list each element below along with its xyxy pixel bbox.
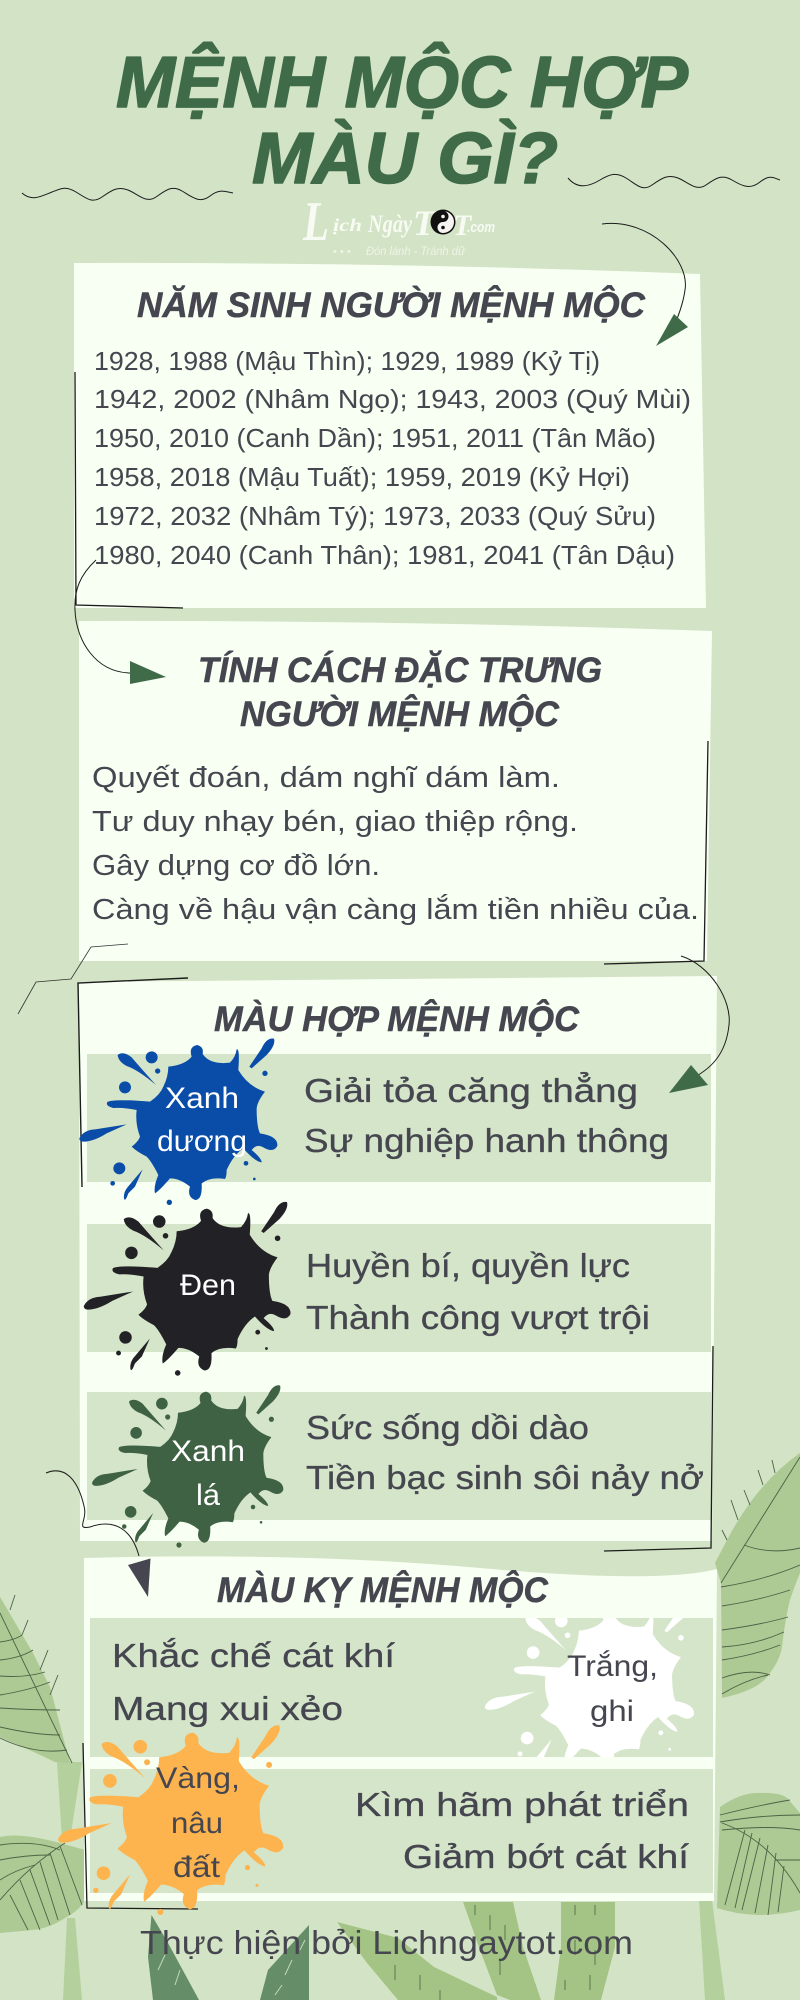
row: yellow background bbox=[90, 1769, 713, 1893]
logo: Đón lành - Tránh dữ bbox=[366, 246, 466, 258]
text: white meaning: Khắc chế cát khí bbox=[112, 1637, 395, 1674]
label: blue bbox=[157, 1082, 247, 1158]
label: blue: Xanh bbox=[165, 1082, 239, 1115]
splat: blue bbox=[79, 1039, 277, 1205]
label: white: Trắng, bbox=[567, 1650, 658, 1683]
row: blue background bbox=[87, 1054, 711, 1182]
splat: green bbox=[92, 1385, 283, 1548]
splat: black bbox=[84, 1202, 291, 1376]
logo: T bbox=[453, 209, 473, 242]
panel: matching colours bbox=[79, 976, 717, 1541]
text: black meaning: Thành công vượt trội bbox=[306, 1299, 650, 1336]
birth year list: 1950, 2010 (Canh Dần); 1951, 2011 (Tân Mão) bbox=[94, 423, 656, 453]
decorative leaves bbox=[0, 1453, 800, 2000]
logo: ịch bbox=[332, 215, 362, 235]
row: white background bbox=[90, 1618, 713, 1757]
panel: birth years bbox=[74, 263, 706, 608]
label: white bbox=[567, 1650, 658, 1728]
label: green: lá bbox=[196, 1479, 220, 1512]
panel: personality bbox=[79, 621, 712, 961]
splat: white bbox=[485, 1618, 694, 1757]
logo: .com bbox=[467, 219, 495, 236]
title: MÀU GÌ? bbox=[252, 119, 558, 199]
squiggle: left bbox=[22, 188, 233, 200]
text: blue meaning: Giải tỏa căng thẳng bbox=[304, 1072, 638, 1109]
label: orange: nâu bbox=[171, 1807, 223, 1840]
label: blue: dương bbox=[157, 1125, 247, 1158]
text: orange meaning: Giảm bớt cát khí bbox=[403, 1838, 689, 1875]
heading: birth years: NĂM SINH NGƯỜI MỆNH MỘC bbox=[137, 285, 646, 325]
logo bbox=[302, 191, 495, 258]
arrow: to personality bbox=[75, 560, 166, 684]
heading: clashing colours: MÀU KỴ MỆNH MỘC bbox=[217, 1570, 549, 1610]
text: blue meaning: Sự nghiệp hanh thông bbox=[304, 1122, 669, 1159]
birth year list: 1942, 2002 (Nhâm Ngọ); 1943, 2003 (Quý Mùi) bbox=[94, 384, 691, 414]
panel: clashing colours bbox=[84, 1556, 717, 1901]
logo: Ngày bbox=[367, 211, 413, 238]
text: orange meaning bbox=[355, 1786, 689, 1875]
personality list: Gây dựng cơ đồ lớn. bbox=[92, 850, 380, 882]
personality list: Quyết đoán, dám nghĩ dám làm. bbox=[92, 762, 560, 794]
row: green background bbox=[87, 1392, 711, 1520]
birth year list: 1980, 2040 (Canh Thân); 1981, 2041 (Tân Dậu) bbox=[94, 540, 675, 570]
arrow: to clashing colours bbox=[46, 1471, 150, 1597]
label: white: ghi bbox=[590, 1695, 634, 1728]
personality list: Tư duy nhạy bén, giao thiệp rộng. bbox=[92, 806, 578, 838]
logo: L bbox=[302, 191, 329, 253]
leaf: left bbox=[0, 1595, 82, 1840]
heading: personality: NGƯỜI MỆNH MỘC bbox=[240, 694, 560, 734]
text: green meaning: Tiền bạc sinh sôi nảy nở bbox=[306, 1459, 704, 1496]
title bbox=[116, 42, 689, 199]
heading: personality bbox=[198, 650, 602, 734]
arrow: to birth years bbox=[602, 223, 688, 346]
leaf: top right bbox=[715, 1453, 800, 1698]
label: orange bbox=[156, 1762, 240, 1884]
squiggle: right bbox=[568, 174, 780, 188]
text: blue meaning bbox=[304, 1072, 669, 1159]
logo: • • • bbox=[333, 246, 351, 258]
leaves: bottom bbox=[148, 1902, 615, 2000]
text: black meaning bbox=[306, 1247, 650, 1336]
text: green meaning bbox=[306, 1409, 704, 1496]
text: green meaning: Sức sống dồi dào bbox=[306, 1409, 589, 1446]
leaf: lower right bbox=[699, 1793, 800, 2000]
icon: yin yang bbox=[430, 210, 456, 234]
splat: orange bbox=[58, 1725, 283, 1915]
hand-drawn frame lines bbox=[18, 372, 713, 1909]
label: black: Đen bbox=[180, 1269, 236, 1302]
label: green bbox=[171, 1435, 245, 1512]
label: green: Xanh bbox=[171, 1435, 245, 1468]
heading: personality: TÍNH CÁCH ĐẶC TRƯNG bbox=[198, 650, 602, 690]
leaf: lower left bbox=[0, 1835, 85, 2000]
birth year list: 1958, 2018 (Mậu Tuất); 1959, 2019 (Kỷ Hợi) bbox=[94, 462, 630, 492]
row: black background bbox=[87, 1224, 711, 1352]
heading: matching colours: MÀU HỢP MỆNH MỘC bbox=[214, 999, 580, 1039]
label: orange: đất bbox=[173, 1851, 221, 1884]
arrow: to matching colours bbox=[669, 956, 729, 1093]
logo: T bbox=[413, 203, 437, 243]
personality list bbox=[92, 762, 699, 926]
text: white meaning bbox=[112, 1637, 395, 1727]
label: orange: Vàng, bbox=[156, 1762, 240, 1795]
title: MỆNH MỘC HỢP bbox=[116, 42, 689, 123]
birth year list bbox=[94, 346, 691, 570]
footer: Thực hiện bởi Lichngaytot.com bbox=[140, 1924, 633, 1961]
birth year list: 1928, 1988 (Mậu Thìn); 1929, 1989 (Kỷ Tị) bbox=[94, 346, 600, 376]
text: orange meaning: Kìm hãm phát triển bbox=[355, 1786, 689, 1823]
personality list: Càng về hậu vận càng lắm tiền nhiều của. bbox=[92, 893, 699, 926]
text: black meaning: Huyền bí, quyền lực bbox=[306, 1247, 630, 1284]
birth year list: 1972, 2032 (Nhâm Tý); 1973, 2033 (Quý Sửu) bbox=[94, 501, 656, 531]
text: white meaning: Mang xui xẻo bbox=[112, 1690, 343, 1727]
